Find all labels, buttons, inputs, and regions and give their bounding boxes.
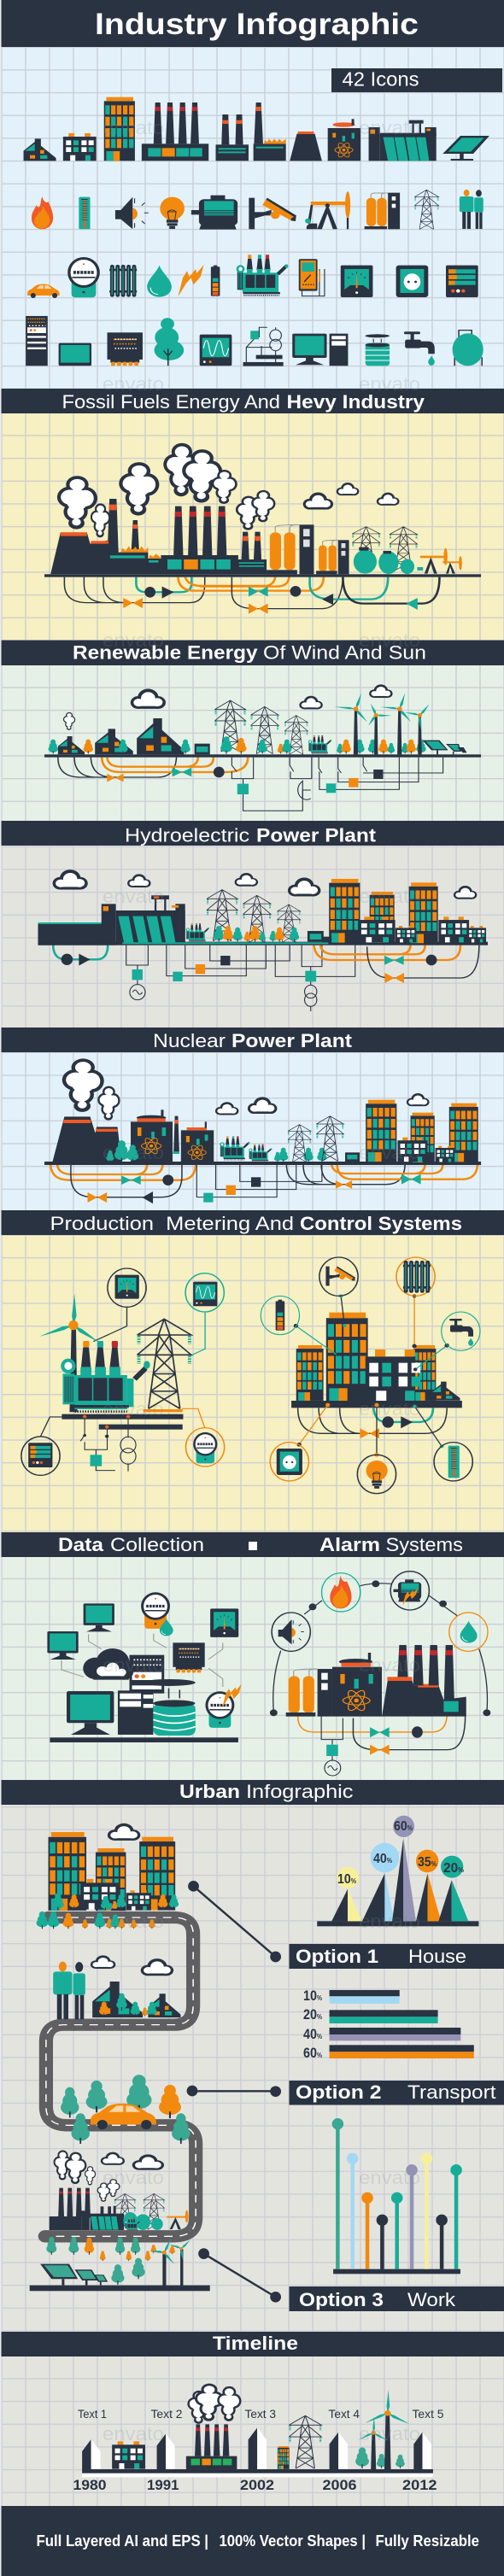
heading: nuclear: Power Plant: [231, 1030, 353, 1051]
cooling towers: [52, 1116, 121, 1163]
watermarks: envato: [103, 117, 164, 138]
ground line: [38, 942, 488, 946]
heading: data collection and alarm systems: Collection: [110, 1534, 204, 1555]
icon: oscilloscope: [200, 335, 231, 366]
base line: [50, 1737, 238, 1742]
heading: urban infographic: Urban: [179, 1781, 240, 1802]
connector lines left: [40, 1308, 205, 1437]
watermarks: envato: [103, 1911, 164, 1932]
icon: oil pump: [305, 191, 350, 229]
heading: timeline: [2, 2332, 504, 2356]
heading: hydroelectric: Power Plant: [256, 825, 377, 846]
band: option 1: House: [408, 1946, 466, 1967]
watermarks: envato: [359, 1911, 420, 1932]
icon: lightning bolt: [178, 265, 204, 296]
heading: hydroelectric: Hydroelectric: [125, 825, 249, 846]
title band: Industry Infographic: [95, 8, 419, 41]
icon: cooling tower: [290, 132, 322, 161]
icon: dam: [369, 120, 437, 161]
dam: [38, 895, 328, 946]
computer tower and monitor: [67, 1690, 153, 1735]
chart labels: bars: 40%: [303, 2026, 322, 2042]
connector: option 2: [187, 2086, 281, 2097]
icon: apartment: [63, 133, 97, 161]
watermarks: envato: [359, 1654, 420, 1676]
trees: [106, 1140, 327, 1162]
dashed connectors: [62, 1634, 223, 1687]
chart labels: bars: [303, 1988, 322, 2061]
lollipop chart: [332, 2118, 462, 2274]
smoke clouds: [57, 443, 275, 537]
icon: electricity meter: [67, 257, 100, 297]
panel: production metering and control: [2, 1235, 504, 1532]
meter with drop: [141, 1592, 173, 1636]
icon: gauge: [341, 266, 372, 297]
heading: data collection and alarm systems: Alarm: [319, 1534, 380, 1555]
circle: water drop: [449, 1613, 488, 1651]
icon: four stack factory: [142, 102, 208, 161]
city buildings: [345, 1100, 478, 1162]
heading: production metering: Production Metering And: [50, 1213, 294, 1234]
heading: renewable energy: Of Wind And Sun: [263, 642, 426, 664]
ground line: [44, 754, 481, 758]
chart labels: triangles: 20%: [443, 1861, 464, 1876]
icon: battery: [211, 266, 220, 296]
footer: [2, 2506, 504, 2576]
heading: production metering: Control Systems: [300, 1213, 462, 1234]
band: option 3: Option 3: [299, 2289, 384, 2310]
icon: office tower: [104, 97, 135, 161]
icon: desktop computer: [292, 334, 348, 366]
band: option 3: Work: [407, 2289, 456, 2310]
heading: hydroelectric: [2, 821, 504, 846]
heading: renewable energy: [2, 641, 504, 665]
band: option 2: Transport: [407, 2081, 495, 2103]
circuit diagram: [80, 1418, 136, 1472]
icon: gas tanks: [365, 193, 400, 229]
oil pumps: [417, 548, 462, 574]
icon: database: [365, 334, 390, 366]
houses: [58, 718, 210, 754]
small monitors: [47, 1603, 114, 1660]
icon: socket: [396, 266, 428, 297]
underground pipes: [64, 577, 439, 614]
heading: renewable energy: Renewable Energy: [73, 642, 258, 664]
circle: thermometer: [434, 1443, 472, 1481]
icon: car: [27, 284, 60, 298]
chart labels: triangles: 40%: [373, 1852, 392, 1866]
transformer: [186, 923, 209, 941]
underground pipes right: [298, 1408, 447, 1438]
icon: security camera: [249, 198, 296, 229]
trees under road: [46, 2237, 175, 2285]
chart labels: bars: 10%: [303, 1988, 322, 2004]
watermarks: envato: [103, 2167, 164, 2188]
circle: oscilloscope: [185, 1273, 224, 1312]
server rack: [130, 1655, 164, 1694]
icon: nuclear plant: [328, 119, 360, 161]
timeline labels: Text 2: [150, 2408, 183, 2421]
busbars: [62, 1414, 183, 1430]
icon: switch diagram: [243, 327, 284, 366]
watermarks: envato: [359, 2167, 420, 2188]
icon: tablet: [59, 343, 91, 366]
pylon: [289, 2415, 321, 2468]
callout: 42 icons: 42 Icons: [342, 68, 419, 91]
teal tanks: [354, 547, 414, 574]
connector: option 1: [188, 1881, 281, 1962]
small plant: [50, 2150, 188, 2230]
heading: data collection and alarm systems: Data: [58, 1534, 104, 1555]
timeline base: [82, 2469, 433, 2477]
city block: [291, 1313, 462, 1408]
ground line: [44, 1162, 481, 1165]
watermarks: [103, 117, 420, 2444]
ground line: [44, 574, 481, 577]
transformers: [220, 1136, 272, 1162]
smoke and clouds: [62, 1058, 430, 1121]
heading: fossil fuels: Fossil Fuels Energy And: [62, 391, 280, 413]
circle: meter: [185, 1428, 225, 1467]
heading: data collection and alarm systems: Systems: [386, 1534, 463, 1555]
chart labels: triangles: 60%: [394, 1819, 413, 1834]
watermarks: envato: [103, 1142, 164, 1163]
icon: big tree: [155, 318, 184, 366]
circle: radiator: [396, 1257, 435, 1296]
icon: control panel: [446, 266, 478, 297]
watermarks: envato: [359, 1142, 420, 1163]
timeline years: 2012: [402, 2478, 437, 2493]
turbines and trees: [355, 2390, 411, 2469]
icon: storage tank: [453, 331, 483, 366]
icon: faucet: [404, 331, 435, 366]
underground lines: [58, 758, 443, 811]
timeline labels: Text 5: [412, 2408, 444, 2421]
icon: pylon: [414, 190, 439, 230]
band: option 1: [289, 1944, 504, 1969]
clouds: [303, 483, 399, 510]
timeline years: 2006: [323, 2478, 357, 2493]
band: option 2: Option 2: [296, 2081, 381, 2103]
band: option 3: [289, 2286, 504, 2311]
icon: thermometer: [79, 197, 91, 229]
timeline years: 1991: [147, 2478, 179, 2493]
heading: fossil fuels: Hevy Industry: [287, 391, 425, 413]
heading: urban infographic: [2, 1780, 504, 1805]
plant silhouette: [50, 499, 267, 574]
icon: two stack factory: [216, 114, 249, 161]
timeline labels: Text 4: [328, 2408, 360, 2421]
chart labels: bars: 60%: [303, 2045, 322, 2061]
trees and car: [61, 2075, 190, 2144]
markers: [82, 2427, 431, 2469]
chart labels: triangles: 35%: [418, 1855, 437, 1870]
icon: people: [460, 190, 483, 229]
small building: [278, 2446, 290, 2469]
panel: data collection and alarm systems: [2, 1557, 504, 1780]
icon: server rack: [26, 316, 48, 366]
icon: water drop: [147, 266, 172, 297]
footer: Full Layered AI and EPS |: [36, 2532, 208, 2550]
icon: motor: [191, 196, 237, 230]
circle: bulb: [357, 1455, 396, 1494]
road: [45, 1917, 196, 2236]
plant pipes: [298, 1716, 466, 1776]
transformer: [308, 735, 331, 753]
apartment: [112, 2441, 145, 2469]
icon: solar panel: [442, 136, 489, 161]
icon: furnace factory: [254, 102, 286, 161]
timeline labels: Text 3: [244, 2408, 276, 2421]
city buildings: [308, 879, 486, 943]
circle: motor with bolt: [390, 1572, 429, 1610]
watermarks: envato: [103, 1654, 164, 1676]
watermarks: envato: [359, 1398, 420, 1420]
pylon: [138, 1319, 191, 1412]
panel: urban infographic: [2, 1805, 504, 2332]
title band: [2, 0, 504, 47]
watermarks: envato: [359, 886, 420, 907]
watermarks: envato: [103, 373, 164, 395]
circle: flame: [322, 1573, 360, 1612]
heading: nuclear: [2, 1027, 504, 1052]
large transformer: [61, 1341, 150, 1412]
chart labels: triangles: 10%: [337, 1872, 356, 1887]
wind turbine: [38, 1293, 101, 1412]
gauge: [210, 1608, 238, 1637]
circle: battery: [261, 1296, 300, 1335]
icon: alarm speaker: [115, 197, 149, 229]
circle: socket: [270, 1443, 308, 1481]
wind turbines and solar: [30, 2239, 210, 2291]
band: option 1: Option 1: [296, 1946, 378, 1967]
timeline years: 1980: [73, 2478, 106, 2493]
heading: nuclear: Nuclear: [153, 1030, 226, 1051]
triangle chart: [317, 1816, 478, 1926]
pylons: [207, 890, 301, 943]
heading: fossil fuels: [2, 389, 504, 413]
underground lines: [53, 945, 479, 1011]
solar panels: [422, 741, 467, 754]
timeline years: [73, 2478, 437, 2493]
connector: option 3: [198, 2248, 281, 2303]
footer: 100% Vector Shapes |: [219, 2532, 366, 2550]
panel: renewable energy: [2, 665, 504, 821]
callout: 42 icons: [331, 68, 502, 92]
icon: house: [24, 138, 56, 161]
chart labels: triangles: [337, 1819, 464, 1887]
database: [143, 1679, 196, 1736]
footer: Fully Resizable: [376, 2532, 479, 2550]
trees: [49, 736, 426, 754]
pylons: [214, 700, 308, 754]
heading: production metering: [2, 1210, 504, 1235]
watermarks: envato: [359, 373, 420, 395]
watermarks: envato: [103, 2423, 164, 2444]
power plant: [286, 1645, 466, 1717]
icon: flame: [32, 196, 53, 229]
trees: [214, 926, 299, 942]
icon: control box: [108, 332, 143, 366]
city on road: [37, 1824, 179, 1929]
panel: timeline: [2, 2356, 504, 2506]
watermarks: envato: [359, 2423, 420, 2444]
icon: light bulb: [160, 197, 185, 229]
heading: data collection and alarm systems: [2, 1532, 504, 1557]
watermarks: envato: [103, 629, 164, 651]
panel: hydroelectric: [2, 846, 504, 1027]
cloud: [83, 1648, 133, 1680]
alarm loop: [271, 1581, 490, 1716]
control box: [173, 1642, 205, 1672]
icon: multimeter: [299, 259, 325, 296]
chart labels: bars: 20%: [303, 2006, 322, 2023]
pylons: [352, 527, 418, 571]
watermarks: envato: [359, 629, 420, 651]
reactors: [131, 1109, 214, 1163]
panel: nuclear: [2, 1052, 504, 1210]
timeline years: 2002: [240, 2478, 274, 2493]
watermarks: envato: [103, 886, 164, 907]
panel: 42 icons: [2, 47, 504, 389]
gas tanks: [267, 524, 349, 574]
circle: camera: [319, 1257, 358, 1296]
icon: transformer: [237, 255, 288, 296]
heading: urban infographic: Infographic: [246, 1781, 354, 1802]
circle: faucet: [442, 1312, 480, 1350]
factory with smoke: [186, 2384, 241, 2469]
wind turbines: [334, 693, 431, 754]
icon: radiator: [109, 265, 137, 297]
circle: gauge: [108, 1268, 146, 1307]
people and houses: [53, 1955, 180, 2019]
band: option 2: [289, 2081, 504, 2105]
circle: control panel: [21, 1437, 60, 1475]
bar chart: [330, 1990, 474, 2058]
heading: timeline: Timeline: [213, 2333, 298, 2354]
circle: speaker: [272, 1613, 310, 1651]
pylons: [288, 1116, 343, 1162]
timeline labels: Text 1: [78, 2408, 107, 2421]
clouds: [63, 684, 393, 730]
connectors right: [294, 1294, 449, 1457]
meter with bolt: [205, 1684, 242, 1728]
panel: fossil fuels: [2, 413, 504, 640]
timeline labels: [78, 2408, 444, 2421]
underground lines: [50, 1165, 478, 1203]
watermarks: envato: [359, 117, 420, 138]
watermarks: envato: [103, 1398, 164, 1420]
clouds: [53, 869, 477, 899]
